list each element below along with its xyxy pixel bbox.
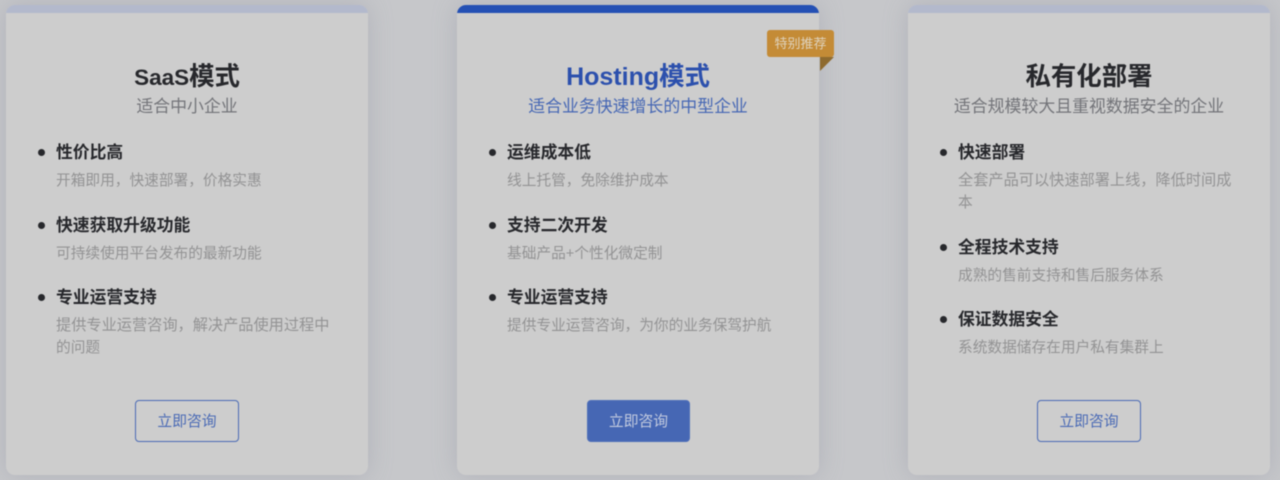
feature description: 基础产品+个性化微定制 xyxy=(507,246,662,262)
bullet marker xyxy=(38,222,45,229)
feature heading: 支持二次开发 xyxy=(507,216,608,235)
plan title: private deployment: 私有化部署 xyxy=(1026,63,1152,91)
feature heading: 快速获取升级功能 xyxy=(56,216,190,235)
feature description xyxy=(958,172,1232,211)
button: consult xyxy=(135,400,239,442)
plan title: SaaS: SaaS模式 xyxy=(134,63,240,91)
bullet marker xyxy=(38,149,45,156)
bullet marker xyxy=(940,149,947,156)
button: consult: 立即咨询 xyxy=(157,414,217,430)
feature description: 提供专业运营咨询，解决产品使用过程中 xyxy=(56,317,329,334)
panel: private deployment xyxy=(908,5,1270,475)
feature description: 提供专业运营咨询，为你的业务保驾护航 xyxy=(507,318,771,334)
bullet marker xyxy=(38,294,45,301)
feature description: 可持续使用平台发布的最新功能 xyxy=(56,246,262,262)
bullet marker xyxy=(489,222,496,229)
feature heading: 全程技术支持 xyxy=(958,238,1059,257)
plan subtitle: private deployment: 适合规模较大且重视数据安全的企业 xyxy=(954,97,1224,116)
feature description: 开箱即用，快速部署，价格实惠 xyxy=(56,173,262,189)
feature description: 的问题 xyxy=(56,340,100,356)
feature description: 系统数据储存在用户私有集群上 xyxy=(958,340,1164,356)
panel: SaaS plan xyxy=(6,5,368,475)
bullet marker xyxy=(489,149,496,156)
feature description xyxy=(56,316,329,356)
button: consult (filled) xyxy=(587,400,690,442)
feature heading: 快速部署 xyxy=(958,143,1025,162)
feature description: 本 xyxy=(958,195,973,211)
plan subtitle: Hosting: 适合业务快速增长的中型企业 xyxy=(528,97,748,116)
plan title: Hosting: Hosting模式 xyxy=(566,63,710,91)
bullet marker xyxy=(940,316,947,323)
feature heading: 专业运营支持 xyxy=(507,288,608,307)
button: consult: 立即咨询 xyxy=(1059,414,1119,430)
button: consult (filled): 立即咨询 xyxy=(609,414,668,430)
badge: recommended ribbon: 特别推荐 xyxy=(774,36,826,51)
plan subtitle: SaaS: 适合中小企业 xyxy=(136,97,238,116)
panel: Hosting plan (recommended) xyxy=(457,5,819,475)
feature heading: 保证数据安全 xyxy=(958,310,1059,329)
feature description: 全套产品可以快速部署上线，降低时间成 xyxy=(958,172,1231,189)
bullet marker xyxy=(940,244,947,251)
feature description: 成熟的售前支持和售后服务体系 xyxy=(958,268,1164,284)
badge: recommended ribbon xyxy=(766,29,835,72)
feature heading: 专业运营支持 xyxy=(56,288,157,307)
feature heading: 运维成本低 xyxy=(507,143,591,162)
button: consult xyxy=(1037,400,1141,442)
feature description: 线上托管，免除维护成本 xyxy=(507,173,669,189)
bullet marker xyxy=(489,294,496,301)
feature heading: 性价比高 xyxy=(56,143,123,162)
